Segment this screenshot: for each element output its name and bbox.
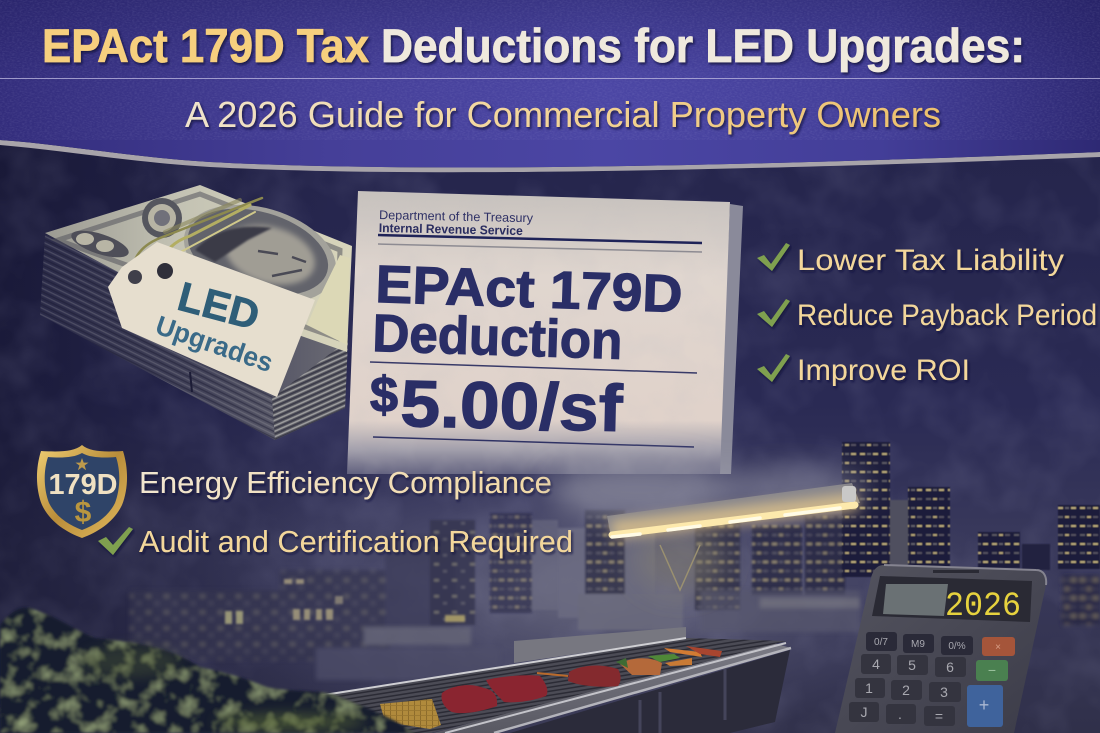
scattered window lights (225, 579, 465, 624)
calculator showing 2026 (835, 565, 1046, 733)
digit keys row 1 2 3: 1 (865, 680, 873, 696)
document page (347, 191, 730, 474)
treasury deduction document (347, 191, 743, 474)
line: Audit and Certification Required: Audit and Certification Required (139, 524, 573, 559)
lcd digits: 2026 (945, 588, 1021, 626)
digit keys row 4 5 6: 6 (946, 659, 954, 675)
digit keys row 1 2 3: 2 (902, 682, 910, 698)
department header: Department of the Treasury (379, 208, 534, 225)
grill table with food (311, 627, 791, 733)
digit keys row 1 2 3 (855, 678, 1003, 727)
top function keys: × (995, 642, 1001, 653)
title: EPAct 179D Tax (42, 19, 369, 72)
banner bottom silver edge (0, 140, 1100, 172)
department header (379, 208, 534, 238)
back counter (514, 627, 686, 663)
title: Deductions for LED Upgrades: (381, 19, 1025, 72)
check icon (98, 527, 133, 555)
paper tag (108, 242, 315, 397)
keypad (849, 632, 1015, 727)
digit keys row 1 2 3: 3 (940, 684, 948, 700)
deduction amount: 5.00/sf (400, 366, 624, 445)
smoke (550, 460, 870, 592)
corn (380, 699, 441, 729)
badge star (76, 458, 88, 470)
digit keys bottom row: = (935, 708, 943, 724)
portrait oval (172, 188, 348, 320)
check item: Lower Tax Liability: Lower Tax Liability (797, 244, 1064, 277)
document back sheet (718, 204, 743, 474)
document heading: EPAct 179D (375, 255, 683, 324)
digit keys bottom row: J (860, 704, 868, 720)
light tube (612, 505, 855, 535)
tag text: LED: LED (173, 273, 264, 339)
deduction amount: $ (370, 367, 398, 423)
department header: Internal Revenue Service (379, 221, 523, 238)
light glow (612, 502, 858, 530)
hanging LED light fixture with smoke (550, 460, 870, 592)
money stack with LED tag (40, 185, 352, 440)
tag text: Upgrades: Upgrades (152, 310, 277, 378)
badge dollar sign: $ (75, 496, 92, 529)
top function keys: M9 (911, 639, 925, 650)
fixture end cap (842, 486, 856, 502)
bill value numerals (68, 225, 132, 263)
foliage bush (0, 608, 415, 733)
digit keys row 4 5 6: 5 (908, 657, 916, 673)
banner purple fabric (0, 0, 1100, 167)
subtitle: A 2026 Guide for Commercial Property Owners (185, 94, 941, 135)
stack of bills (40, 235, 348, 440)
badge text: 179D (48, 469, 118, 501)
top function keys (866, 632, 1015, 656)
skewer (537, 673, 568, 676)
mid buildings (430, 510, 845, 630)
document heading (372, 255, 683, 371)
bill bright right edge (307, 255, 350, 345)
banner divider line (0, 78, 1100, 79)
distant blurred buildings left (130, 535, 500, 680)
grill grate (311, 638, 786, 733)
meat pieces (441, 665, 621, 713)
compliance text (98, 465, 573, 559)
title (42, 19, 1025, 72)
tag strings (133, 198, 262, 280)
suspension wires (660, 545, 700, 590)
bill seal (142, 198, 182, 238)
digit keys row 4 5 6: − (988, 662, 996, 678)
shield badge 179D (37, 445, 127, 538)
calculator body (835, 565, 1046, 733)
document heading: Deduction (372, 304, 623, 371)
benefits checklist (757, 243, 1097, 387)
table legs shadow (510, 650, 790, 733)
display housing (872, 576, 1032, 622)
top function keys: 0/7 (874, 637, 888, 648)
digit keys row 4 5 6: 4 (872, 656, 880, 672)
digit keys row 4 5 6 (861, 654, 1008, 681)
digit keys row 1 2 3: + (979, 695, 989, 715)
check item: Improve ROI: Improve ROI (797, 354, 970, 387)
header banner (0, 0, 1100, 172)
top bill (45, 185, 352, 352)
line: Energy Efficiency Compliance: Energy Efficiency Compliance (139, 465, 552, 500)
indicator slot (933, 570, 979, 573)
lcd panel (883, 584, 948, 616)
blurred rooftop band right (700, 575, 1100, 632)
digit keys bottom row: . (898, 706, 902, 722)
tall buildings right (842, 442, 1100, 577)
top function keys: 0/% (948, 641, 966, 652)
vegetables (616, 646, 722, 675)
city skyline (130, 442, 1100, 680)
digit keys bottom row (849, 702, 955, 726)
steel front edge (400, 642, 791, 733)
fixture housing (607, 483, 860, 537)
